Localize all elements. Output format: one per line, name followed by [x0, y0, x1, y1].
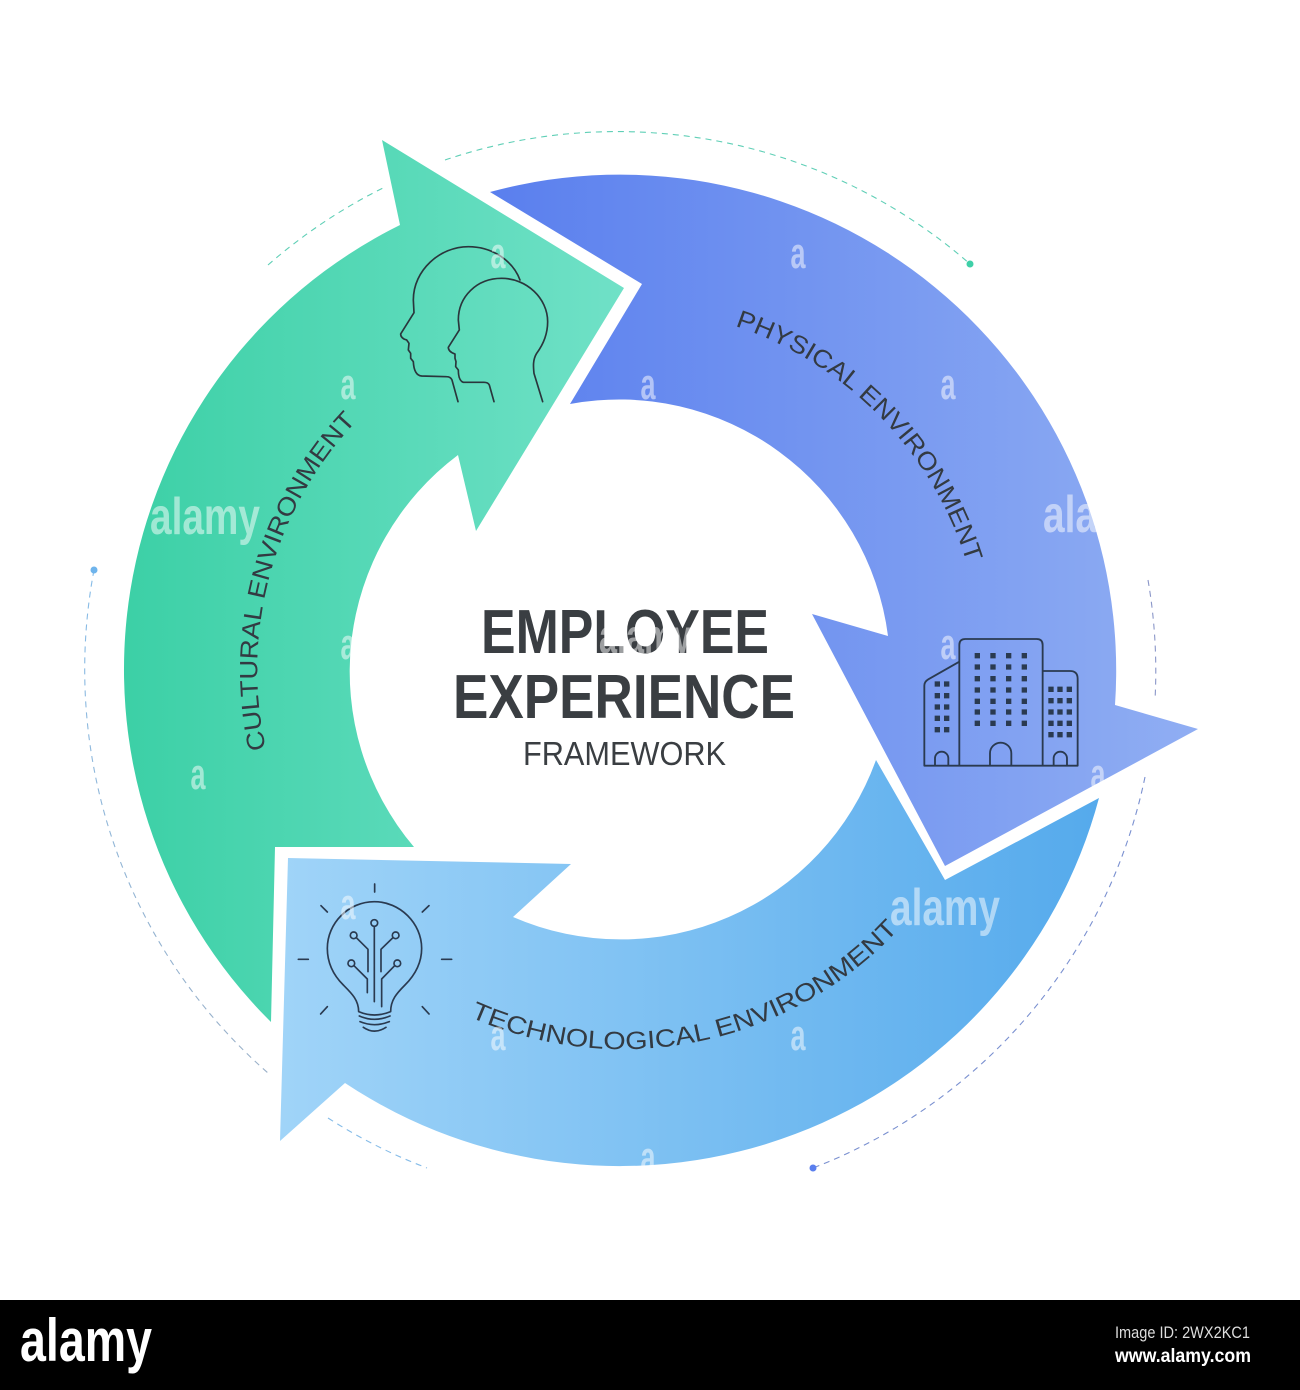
watermarks: a	[790, 1011, 806, 1060]
watermarks: a	[790, 229, 806, 278]
footer bar	[0, 1300, 1300, 1390]
watermarks: a	[940, 360, 956, 409]
watermarks: a	[490, 229, 506, 278]
icon: buildings	[924, 639, 1078, 766]
label: technological environment: TECHNOLOGICAL ENVIRONMENT	[476, 918, 894, 1050]
label: physical environment: PHYSICAL ENVIRONMENT	[737, 310, 983, 558]
watermarks	[150, 229, 1106, 1182]
arrow: technological environment	[280, 760, 1099, 1166]
icon: two heads	[401, 247, 548, 402]
watermarks: a	[640, 1133, 656, 1182]
dot: left arc start	[90, 566, 98, 574]
arrow: cultural environment	[124, 140, 624, 1022]
watermarks: alamy	[150, 488, 260, 546]
title line: experience: EXPERIENCE	[453, 663, 795, 732]
dot: top arc end	[966, 260, 974, 268]
watermarks: ala	[1043, 486, 1098, 544]
watermarks: a	[1090, 750, 1106, 799]
icon: light bulb with circuit	[298, 884, 452, 1031]
watermarks: a	[190, 750, 206, 799]
watermarks: a	[340, 620, 356, 669]
label: cultural environment: CULTURAL ENVIRONMENT	[240, 410, 352, 750]
watermarks: alamy	[599, 611, 691, 664]
watermarks: a	[940, 620, 956, 669]
subtitle: FRAMEWORK	[523, 735, 726, 772]
watermarks: a	[340, 880, 356, 929]
watermarks: alamy	[890, 879, 1000, 937]
watermarks: a	[490, 1011, 506, 1060]
watermarks: a	[640, 360, 656, 409]
arrow: physical environment	[490, 175, 1198, 866]
title line: employee: EMPLOYEE	[481, 598, 769, 667]
footer image id: Image ID: 2WX2KC1	[1115, 1323, 1250, 1342]
dashed orbit arcs	[85, 132, 1156, 1168]
watermarks: a	[340, 360, 356, 409]
footer url: www.alamy.com	[1114, 1346, 1251, 1367]
title	[453, 598, 795, 772]
footer logo: alamy	[20, 1307, 152, 1374]
dot: bottom arc end	[810, 1164, 816, 1172]
